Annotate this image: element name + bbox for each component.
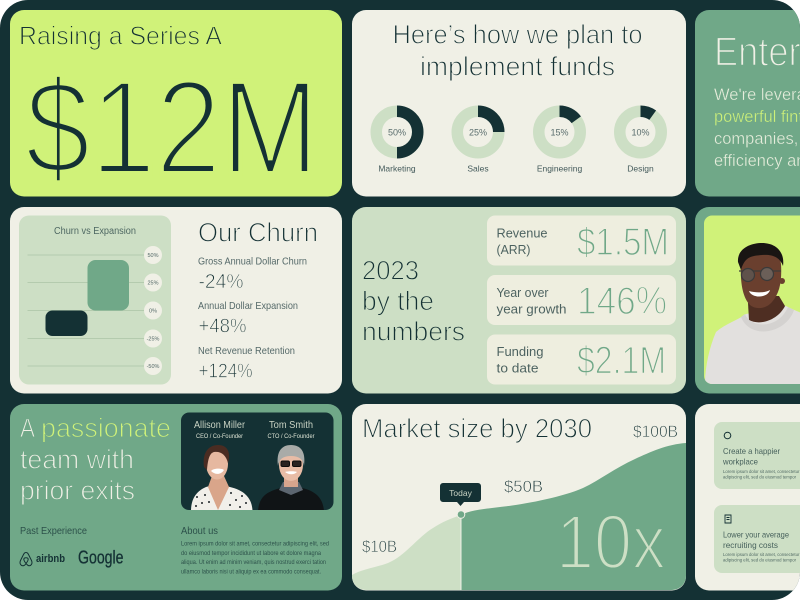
heading: market size by 2030: Market size by 2030 [362,414,592,444]
photo: tom smith [258,445,324,511]
about us: About us [181,525,218,537]
heading: implement funds: implement funds [420,52,615,82]
panel: enterprise [695,10,800,196]
donut: design 10%: Design [627,164,654,174]
stat: net revenue retention: Net Revenue Retention [198,345,295,357]
donut: sales 25% [457,111,499,174]
donut: sales 25%: Sales [467,164,489,174]
heading: a passionate team with prior exits: team with [20,444,134,474]
card: funding to date: Funding [496,344,544,359]
marker: today: Today [449,488,473,498]
logo: google: Google [78,548,124,568]
label: $10B: $10B [362,538,397,556]
about us: aliqua. Ut enim ad minim veniam, quis nostrud exerci tation [181,560,326,566]
card: year over year growth: Year over [496,285,549,300]
chart: churn vs expansion: -25% [147,336,160,342]
heading: 2023 by the numbers: by the [362,286,434,316]
marker: today [440,483,481,518]
card: recruiting costs: Lower your average [723,530,789,540]
panel: market size [352,404,686,591]
card: funding to date: $2.1M [577,340,666,382]
about us [181,525,329,576]
label: $100B: $100B [633,423,678,441]
stat: gross annual dollar churn: -24% [198,271,244,293]
founders card: Allison Miller [194,420,246,431]
donut: design 10%: 10% [631,127,650,137]
card: revenue: Revenue [496,226,548,240]
founders card: CEO / Co-Founder [196,434,243,440]
heading: 2023 by the numbers [364,261,464,340]
chart: churn vs expansion: Churn vs Expansion [54,226,136,237]
panel: 2023 by the numbers [352,207,686,394]
area chart: market growth [352,443,686,591]
logo: airbnb: airbnb [36,553,65,565]
heading: a passionate team with prior exits [20,413,171,506]
photo: allison miller [191,445,252,511]
stat: annual dollar expansion [198,302,298,332]
card: happier workplace: adipiscing elit, sed do eiusmod tempor [723,474,797,480]
chart: churn vs expansion: 50% [147,253,159,259]
stat: gross annual dollar churn [198,257,306,288]
card: happier workplace: workplace [722,456,758,466]
heading: a passionate team with prior exits: passionate [41,413,171,443]
donut: engineering 15%: Engineering [537,164,582,174]
donut: design 10% [620,111,661,174]
stat: annual dollar expansion: Annual Dollar Expansion [198,300,298,312]
card: happier workplace: Lorem ipsum dolor sit amet, consectetur [723,469,800,474]
stat: net revenue retention [198,346,294,378]
panel: raising a series A [10,10,342,202]
panel: benefits [695,404,800,590]
card: recruiting costs [714,505,800,573]
card: revenue: (ARR) [496,242,530,257]
heading: a passionate team with prior exits: A [20,413,35,443]
stat: annual dollar expansion: +48% [198,316,247,338]
card: recruiting costs: recruiting costs [723,540,778,550]
heading: our churn: Our Churn [198,218,318,248]
founders card: Tom Smith [269,420,313,431]
body text: enterprise [714,86,800,170]
card: recruiting costs: adipiscing elit, sed do eiusmod tempor [723,558,797,562]
donut: marketing 50%: 50% [388,127,406,137]
card: year over year growth: year growth [496,302,566,316]
chart: churn vs expansion: -50% [147,364,160,370]
donut: engineering 15% [537,111,582,174]
heading: a passionate team with prior exits: prior exits [20,476,135,506]
card: revenue: $1.5M [577,221,669,264]
card: year over year growth [487,275,676,325]
card: funding to date: to date [496,360,538,376]
heading: 2023 by the numbers: 2023 [362,256,419,286]
chart: churn vs expansion [19,216,171,384]
founders card [181,412,334,511]
panel: implement funds [352,10,686,196]
card: happier workplace: Create a happier [723,446,780,456]
big number: $12M: $12M [25,54,319,202]
about us: ullamco laboris nisi ut aliquip ex ea commodo consequat. [181,570,321,576]
card: recruiting costs: Lorem ipsum dolor sit amet, consectetur [723,552,800,557]
donut: engineering 15%: 15% [550,127,569,137]
founders card: CTO / Co-Founder [268,434,314,440]
stat: gross annual dollar churn: Gross Annual Dollar Churn [198,256,307,268]
about us: Lorem ipsum dolor sit amet, consectetur adipiscing elit, sed [181,542,329,548]
heading: implement funds [395,24,641,80]
icon: document [725,515,731,523]
photo: smiling man in glasses [704,216,800,384]
big number: 10x: 10x [556,500,666,586]
label: $50B: $50B [504,478,543,496]
heading: implement funds: Here’s how we plan to [392,20,642,50]
heading: raising a series A: Raising a Series A [19,20,223,50]
card: funding to date [487,334,676,384]
stat: net revenue retention: +124% [198,360,253,382]
chart: churn vs expansion: 0% [149,308,157,314]
chart: churn vs expansion: 25% [147,280,159,286]
icon: smiley [724,432,731,439]
panel: our churn [10,207,342,394]
past experience [20,525,124,568]
card: revenue [487,216,676,266]
about us: do eiusmod tempor incididunt ut labore et dolore magna [181,551,322,557]
card: happier workplace [714,422,800,489]
donut: marketing 50%: Marketing [378,164,416,174]
past experience: Past Experience [20,525,87,537]
donut: sales 25%: 25% [469,127,487,137]
panel: portrait [695,207,800,394]
card: year over year growth: 146% [577,280,667,323]
donut: marketing 50% [376,111,418,174]
panel: team [10,404,342,590]
heading: 2023 by the numbers: numbers [362,316,465,346]
